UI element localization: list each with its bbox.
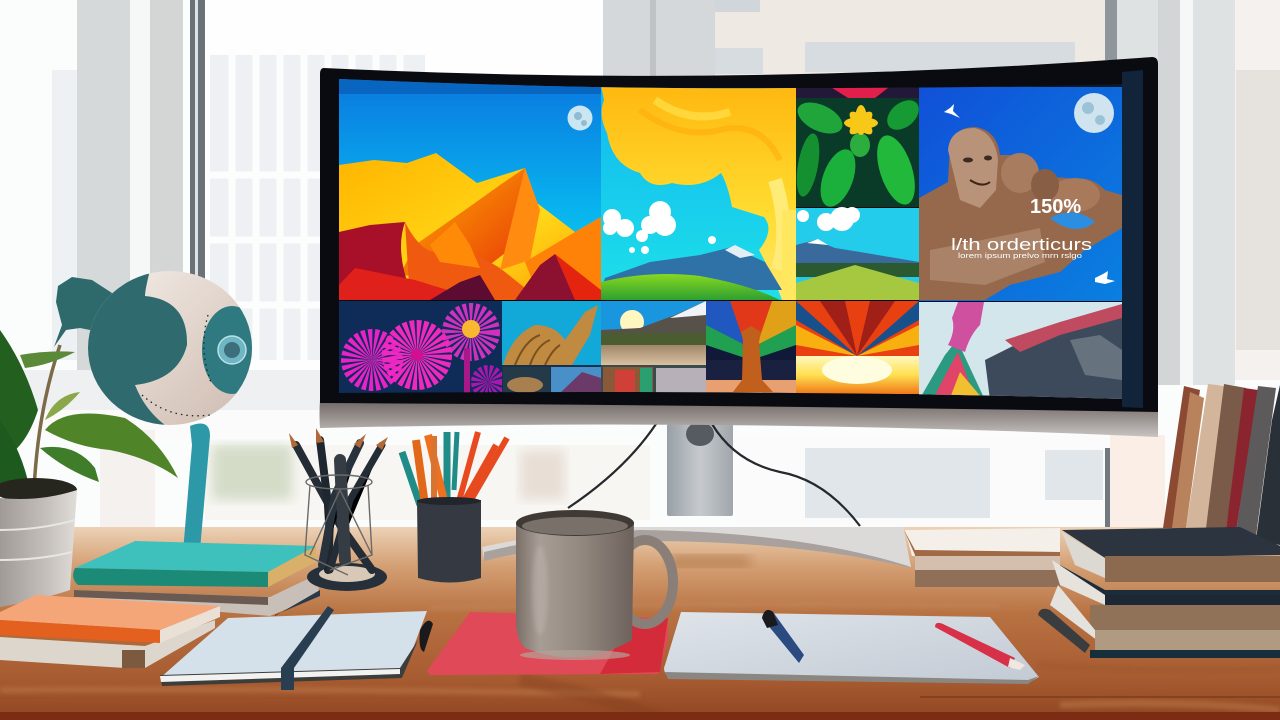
panel: field landscape <box>796 207 919 300</box>
monitor silver chin <box>320 400 1158 437</box>
tablet with two pens <box>664 610 1039 684</box>
plant pot <box>0 490 77 607</box>
panel: sunburst <box>796 301 919 394</box>
panel: rainbow figure <box>706 301 796 393</box>
poster text: 150% <box>1030 196 1081 218</box>
panel: mountain and colourful dress <box>919 302 1122 400</box>
notebooks behind <box>904 528 1060 587</box>
blue pen <box>762 610 804 663</box>
panel: orange mountains <box>339 78 601 300</box>
panel: magenta flowers <box>339 301 502 397</box>
panel: golden shell sculpture <box>502 301 601 393</box>
open notebook with pen <box>160 606 433 690</box>
panel: road and mountain <box>601 301 706 393</box>
screen panels <box>339 78 1122 400</box>
panel: stone figure poster: lorem ipsum prelvo mrn rslgo <box>958 253 1082 260</box>
stack of hardcover books <box>1038 527 1280 658</box>
wire pencil holder <box>289 428 388 591</box>
panel: stone figure poster <box>919 78 1122 301</box>
books under lamp <box>73 541 320 616</box>
panel: yellow cloud over valley <box>601 86 796 300</box>
panel: stone figure poster: l/th orderticurs <box>951 235 1092 254</box>
curved monitor <box>320 57 1158 437</box>
pen on notebook <box>281 606 334 690</box>
monitor stand and cables <box>482 422 911 568</box>
lamp stem <box>183 424 210 552</box>
lamp neck <box>54 277 112 347</box>
eyeball webcam lamp <box>54 265 262 552</box>
black pen clip <box>420 621 433 652</box>
coffee mug <box>516 510 673 660</box>
pencil cup <box>402 432 507 582</box>
wooden desk <box>0 527 1280 720</box>
red desk mat <box>427 612 668 675</box>
monitor black bezel <box>320 57 1158 412</box>
red pen <box>935 623 1015 668</box>
panel: green leaves <box>796 88 919 207</box>
lens <box>218 336 246 364</box>
upright books on the right <box>1163 384 1280 545</box>
potted plant <box>0 330 178 607</box>
orange book stack <box>0 595 220 668</box>
eye ball <box>88 271 252 425</box>
